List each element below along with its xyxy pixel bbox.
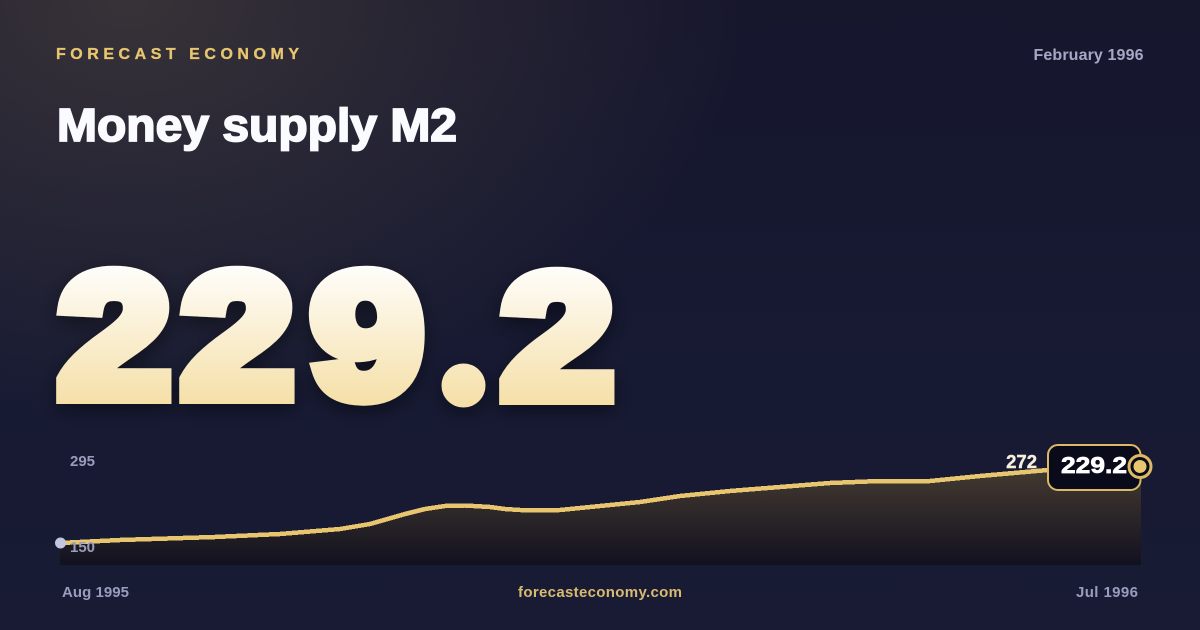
brand label: FORECAST ECONOMY [56,46,299,63]
big value: 2 [181,237,293,433]
start point marker [55,538,66,548]
chart area fill [60,466,1141,565]
y axis max label: 295 [70,453,95,470]
big value: 9 [311,237,423,433]
x axis start label: Aug 1995 [62,584,129,601]
website: forecasteconomy.com [518,584,682,601]
big value [58,237,613,434]
y axis min label: 150 [70,539,95,556]
chart: money supply line [55,445,1151,565]
big value: 2 [58,237,170,433]
peak label: 272 [1006,451,1037,472]
big value: 2 [501,238,613,434]
callout value badge [1048,445,1140,490]
chart line [60,466,1141,543]
x axis end label: Jul 1996 [1076,584,1138,601]
end point marker [1129,456,1151,478]
big value: . [448,306,480,418]
callout value badge: 229.2 [1061,452,1127,478]
title: Money supply M2 [57,99,457,151]
date: February 1996 [1034,47,1144,64]
